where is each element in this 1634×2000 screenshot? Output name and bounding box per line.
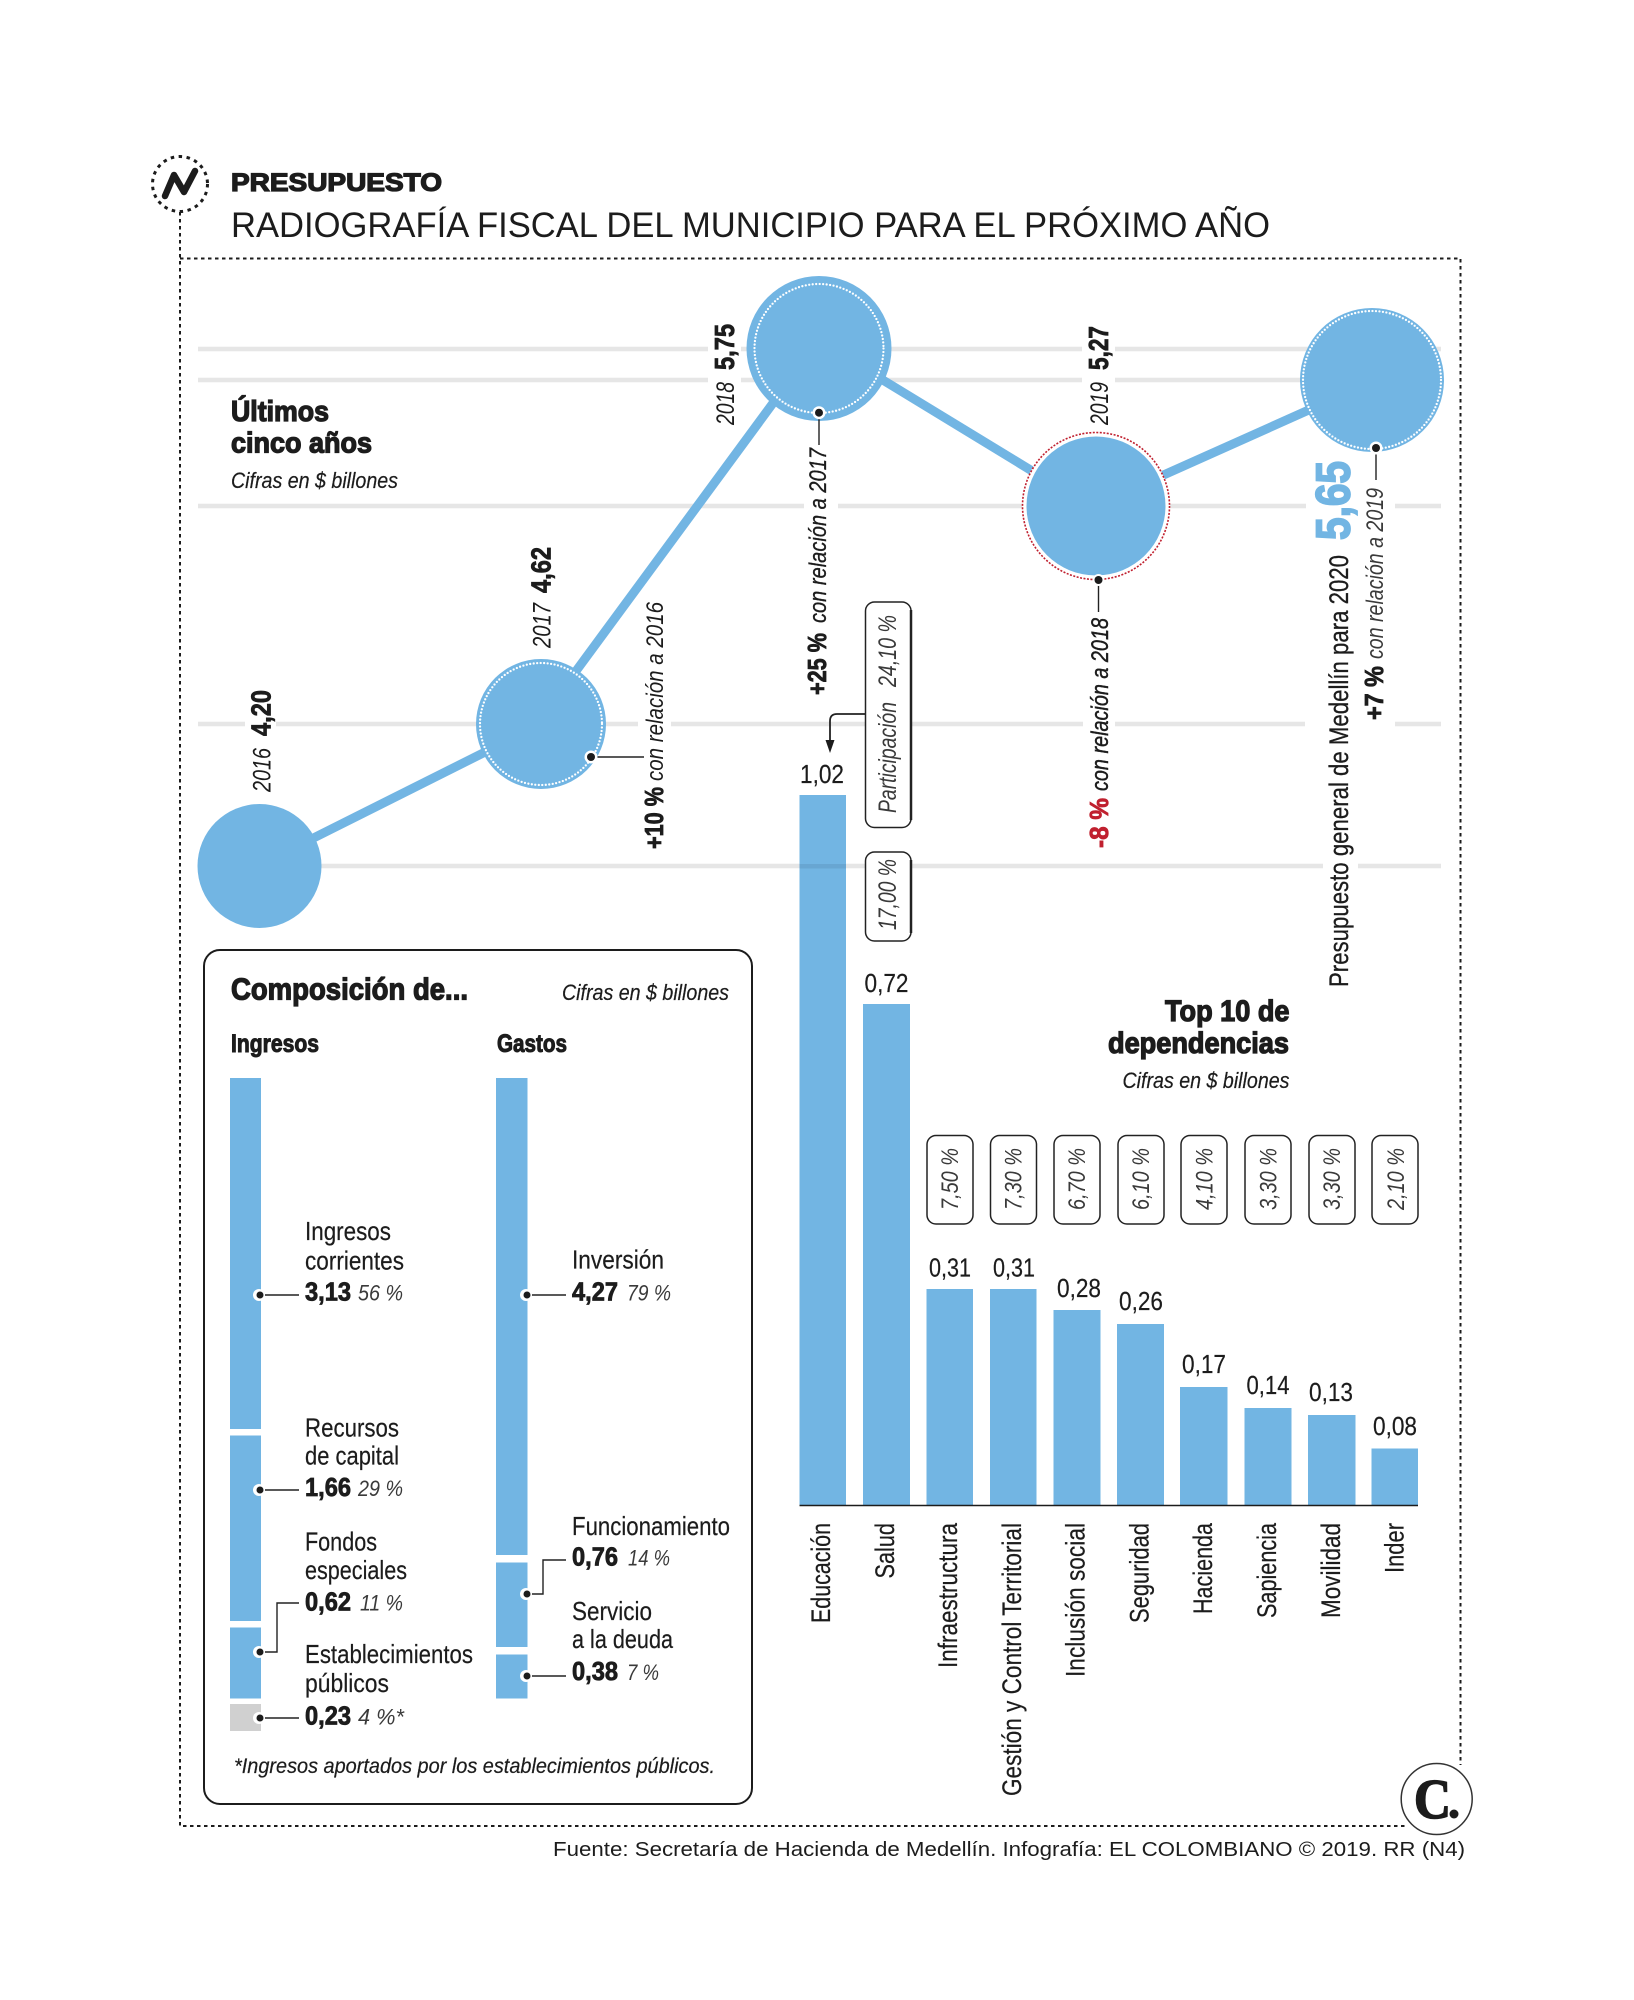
share pills: 7,30 % — [1000, 1148, 1028, 1210]
share pills: 4,10 % — [1192, 1148, 1218, 1210]
point 2018 — [746, 276, 892, 421]
servicio a la deuda — [520, 1596, 673, 1686]
servicio a la deuda: 0,38 — [572, 1656, 618, 1686]
icon: N logo — [152, 156, 208, 212]
label: 2017: 2017 — [528, 602, 556, 649]
callout: +10 %: con relación a 2016 — [642, 601, 669, 781]
inversion: Inversión — [572, 1244, 664, 1274]
column: ingresos — [230, 1030, 473, 1731]
funcionamiento — [520, 1511, 730, 1600]
recursos de capital: Recursos — [305, 1412, 399, 1442]
heading: last five years: cinco años — [231, 428, 372, 460]
callout: 2020 budget: 5,65 — [1308, 461, 1361, 540]
category labels: Educación — [806, 1523, 836, 1623]
callout: +25 %: con relación a 2017 — [805, 447, 832, 623]
ingresos corrientes: 56 % — [358, 1280, 403, 1306]
servicio a la deuda: 7 % — [627, 1660, 659, 1685]
share: educacion: 24,10 % — [874, 615, 902, 688]
servicio a la deuda: Servicio — [572, 1596, 652, 1626]
establecimientos publicos: 0,23 — [305, 1700, 351, 1730]
point 2016 — [198, 804, 322, 928]
callout: +10 % — [584, 601, 669, 849]
label: 2018: 2018 — [712, 382, 740, 426]
ingresos corrientes: 3,13 — [305, 1276, 351, 1306]
share pills: 2,10 % — [1383, 1148, 1410, 1211]
category labels — [806, 1522, 1410, 1796]
category labels: Movilidad — [1316, 1523, 1346, 1618]
callout: 2020 budget — [1308, 442, 1389, 987]
inversion: 79 % — [627, 1280, 671, 1306]
bars — [800, 795, 1418, 1506]
callout: 2020 budget: +7 % — [1359, 666, 1389, 720]
category labels: Inder — [1380, 1523, 1410, 1573]
fondos especiales — [253, 1526, 407, 1658]
callout: 2020 budget: con relación a 2019 — [1362, 488, 1389, 659]
establecimientos publicos: públicos — [305, 1668, 389, 1698]
callout: +25 % — [802, 406, 832, 695]
label: 2018: 5,75 — [709, 324, 740, 370]
label: 2017 — [526, 547, 556, 649]
column: gastos: Gastos — [497, 1030, 567, 1058]
bar values — [800, 759, 1417, 1441]
ingresos corrientes: corrientes — [305, 1246, 404, 1276]
recursos de capital — [253, 1412, 403, 1502]
category labels: Hacienda — [1188, 1522, 1218, 1614]
funcionamiento: 14 % — [628, 1546, 670, 1570]
fondos especiales: 0,62 — [305, 1586, 351, 1616]
establecimientos publicos — [253, 1639, 473, 1730]
share: educacion — [826, 602, 911, 828]
fondos especiales: Fondos — [305, 1526, 377, 1556]
fondos especiales: especiales — [305, 1555, 407, 1585]
establecimientos publicos: 4 %* — [358, 1704, 405, 1730]
icon: El Colombiano logo: C — [1414, 1769, 1451, 1831]
bar values: 0,17 — [1182, 1349, 1226, 1379]
line segments — [260, 360, 1340, 865]
callout: 2020 budget: Presupuesto general de Medellín para 2020 — [1324, 555, 1354, 987]
heading: top 10: Top 10 de — [1165, 995, 1290, 1028]
label: 2016: 4,20 — [246, 690, 277, 736]
source line: Fuente: Secretaría de Hacienda de Medellín. Infografía: EL COLOMBIANO © 2019. RR (N4) — [553, 1839, 1465, 1861]
category labels: Salud — [870, 1523, 900, 1578]
recursos de capital: 29 % — [357, 1476, 403, 1501]
column: ingresos: Ingresos — [231, 1030, 319, 1058]
bar values: 0,14 — [1246, 1370, 1290, 1400]
label: 2019: 5,27 — [1083, 326, 1114, 370]
funcionamiento: 0,76 — [572, 1542, 618, 1572]
label: 2019 — [1083, 326, 1114, 426]
chart: last five years line — [198, 276, 1444, 928]
share: salud — [866, 852, 911, 941]
share pills: 3,30 % — [1256, 1148, 1282, 1210]
heading: top 10 — [1108, 995, 1290, 1093]
callout: -8 %: -8 % — [1084, 798, 1114, 848]
heading: last five years — [231, 394, 398, 493]
fondos especiales: 11 % — [360, 1590, 403, 1616]
share: salud: 17,00 % — [874, 859, 902, 930]
bar values: 0,26 — [1119, 1286, 1163, 1316]
heading: last five years: Cifras en $ billones — [231, 468, 398, 493]
category labels: Inclusión social — [1060, 1523, 1090, 1677]
ingresos corrientes — [253, 1216, 404, 1306]
callout: -8 %: con relación a 2018 — [1087, 617, 1114, 791]
point 2020 — [1300, 308, 1444, 452]
panel unit note: Cifras en $ billones — [562, 980, 729, 1005]
category labels: Seguridad — [1124, 1523, 1154, 1623]
label: 2019: 2019 — [1086, 382, 1114, 426]
heading: last five years: Últimos — [231, 394, 329, 428]
inversion — [520, 1244, 671, 1306]
bar values: 0,28 — [1057, 1273, 1101, 1303]
funcionamiento: Funcionamiento — [572, 1511, 730, 1541]
share pills: 6,10 % — [1128, 1148, 1155, 1210]
heading: kicker: PRESUPUESTO — [231, 169, 442, 197]
panel: composition — [204, 950, 752, 1804]
bar values: 0,31 — [993, 1252, 1035, 1282]
bar values: 0,08 — [1373, 1411, 1417, 1441]
category labels: Gestión y Control Territorial — [997, 1523, 1027, 1796]
servicio a la deuda: a la deuda — [572, 1624, 673, 1654]
heading: top 10: dependencias — [1108, 1027, 1289, 1060]
share pills: 3,30 % — [1319, 1148, 1346, 1210]
heading: top 10: Cifras en $ billones — [1122, 1068, 1290, 1093]
callout: +10 %: +10 % — [639, 787, 669, 849]
share pills — [927, 1136, 1418, 1224]
callout: +25 %: +25 % — [802, 633, 832, 695]
footnote: *Ingresos aportados por los establecimientos públicos. — [234, 1755, 715, 1778]
callout: -8 % — [1084, 574, 1114, 848]
share: educacion: Participación — [874, 702, 902, 813]
label: 2016 — [246, 690, 277, 793]
bar chart: top 10 dependencias — [800, 602, 1418, 1796]
inversion: 4,27 — [572, 1276, 618, 1306]
share pills: 6,70 % — [1064, 1148, 1091, 1210]
bar values: 1,02 — [800, 759, 844, 789]
point 2017 — [476, 659, 606, 789]
title: RADIOGRAFÍA FISCAL DEL MUNICIPIO PARA EL PRÓXIMO AÑO — [231, 206, 1270, 245]
recursos de capital: 1,66 — [305, 1472, 351, 1502]
recursos de capital: de capital — [305, 1440, 399, 1470]
ingresos corrientes: Ingresos — [305, 1216, 391, 1246]
label: 2016: 2016 — [249, 748, 277, 793]
bar values: 0,72 — [864, 968, 908, 998]
label: 2017: 4,62 — [526, 547, 556, 593]
icon: El Colombiano logo — [1401, 1764, 1472, 1834]
bar values: 0,31 — [929, 1252, 971, 1282]
column: gastos — [496, 1030, 730, 1698]
share pills: 7,50 % — [937, 1148, 964, 1210]
establecimientos publicos: Establecimientos — [305, 1639, 473, 1669]
category labels: Infraestructura — [933, 1522, 963, 1668]
panel heading: Composición de... — [231, 972, 468, 1006]
label: 2018 — [709, 324, 740, 426]
bar values: 0,13 — [1309, 1377, 1353, 1407]
point 2019 — [1022, 432, 1170, 580]
category labels: Sapiencia — [1252, 1522, 1282, 1618]
